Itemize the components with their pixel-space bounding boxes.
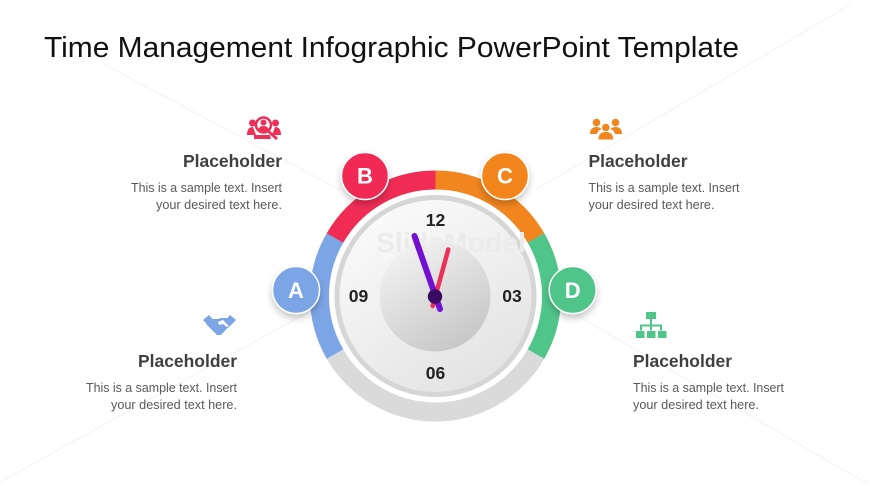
icon: handshake <box>203 315 236 335</box>
badge B: B <box>357 164 373 188</box>
panel: C text: your desired text here. <box>588 198 714 212</box>
panel: C text: Placeholder <box>588 151 688 171</box>
panel: A text: This is a sample text. Insert <box>86 381 238 395</box>
panel: D text <box>633 351 785 412</box>
clock hands <box>414 236 448 309</box>
hour numbers: 09 <box>349 286 368 306</box>
clock ring <box>319 180 552 412</box>
clock face <box>334 195 536 397</box>
panel: B text: your desired text here. <box>156 198 282 212</box>
clock inner disc <box>380 240 490 352</box>
panel: A text <box>86 351 238 412</box>
panel: D text: Placeholder <box>633 351 732 371</box>
badge C <box>482 152 528 200</box>
hour numbers: 03 <box>502 286 522 306</box>
hour numbers: 12 <box>426 210 445 230</box>
hour numbers: 06 <box>426 363 445 383</box>
panel: A text: your desired text here. <box>111 398 237 412</box>
panel: B text <box>131 151 283 212</box>
badge B <box>342 152 388 200</box>
badge A <box>272 266 320 314</box>
badge A: A <box>288 278 304 303</box>
badge C: C <box>497 164 513 188</box>
icon: org chart <box>636 312 666 338</box>
watermark: SlideModel <box>376 227 526 258</box>
panel: D text: your desired text here. <box>633 398 759 412</box>
icon: people group <box>590 119 622 140</box>
badge D: D <box>565 278 581 303</box>
badge D <box>549 266 596 314</box>
hour numbers <box>349 210 522 383</box>
panel: C text: This is a sample text. Insert <box>588 181 740 195</box>
panel: B text: Placeholder <box>183 151 282 171</box>
panel: C text <box>588 151 740 212</box>
panel: B text: This is a sample text. Insert <box>131 181 283 195</box>
panel: D text: This is a sample text. Insert <box>633 381 785 395</box>
icon: team search <box>247 118 281 140</box>
panel: A text: Placeholder <box>138 351 237 371</box>
title: Time Management Infographic PowerPoint Template <box>44 32 739 64</box>
